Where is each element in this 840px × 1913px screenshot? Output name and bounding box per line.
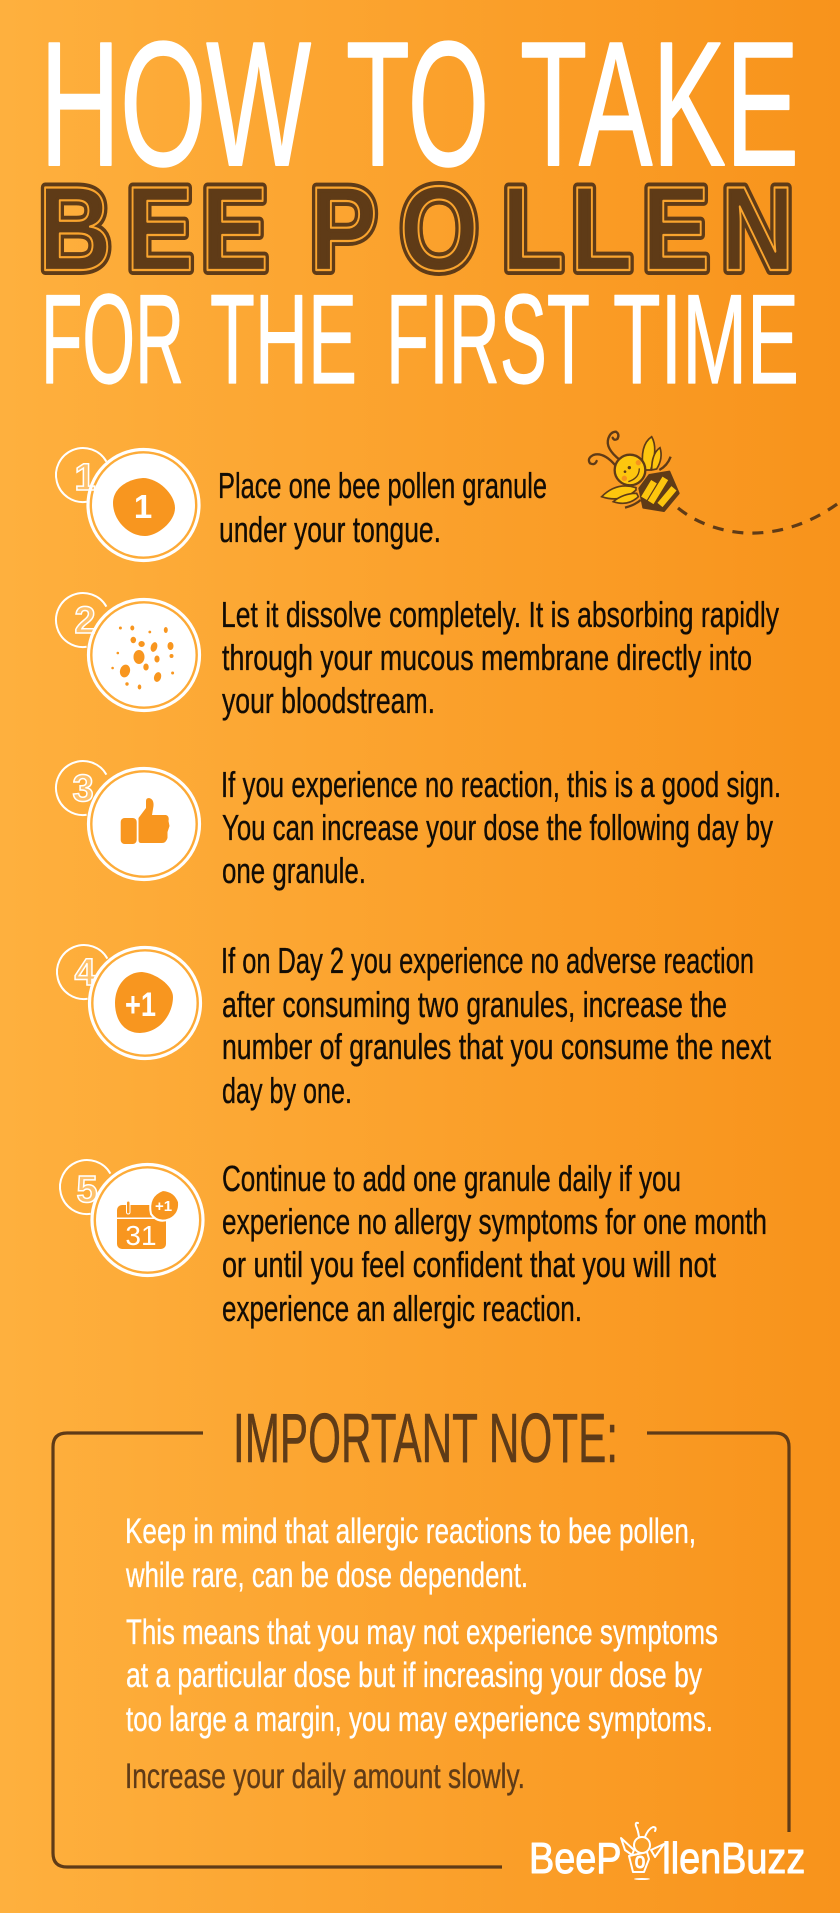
step 1 text bbox=[218, 465, 547, 550]
note paragraph 2 bbox=[126, 1613, 718, 1739]
step 2 bbox=[56, 593, 779, 721]
title line 3: FOR bbox=[41, 268, 184, 410]
step 3 icon: thumbs up bbox=[88, 768, 200, 880]
step 5 number badge: 5 bbox=[76, 1169, 98, 1211]
step 5 text: Continue to add one granule daily if you bbox=[222, 1158, 681, 1199]
step 3 number badge bbox=[56, 761, 106, 815]
title line 1: HOW bbox=[40, 5, 311, 203]
step 3 bbox=[56, 761, 781, 891]
title bbox=[38, 5, 799, 410]
step 2 text bbox=[221, 594, 779, 721]
step 3 text: one granule. bbox=[222, 850, 366, 891]
note paragraph 1 bbox=[125, 1512, 696, 1595]
step 4 bbox=[57, 940, 771, 1111]
step 4 icon: plus one granule: +1 bbox=[125, 986, 156, 1024]
dashed flight path bbox=[678, 502, 840, 533]
step 1 text: Place one bee pollen granule bbox=[218, 465, 547, 506]
title line 3 bbox=[41, 268, 799, 410]
step 1 icon: granule bbox=[88, 450, 199, 560]
note frame bbox=[53, 1433, 789, 1867]
logo wordmark: BeeP bbox=[529, 1833, 622, 1883]
step 1 number badge bbox=[56, 448, 106, 502]
title line 2: bee pollen: BEE POLLEN bbox=[38, 161, 794, 296]
step 5 icon: calendar plus one: 31 bbox=[125, 1220, 157, 1251]
title line 3: FIRST bbox=[386, 268, 590, 410]
logo: Bee Pollen Buzz bbox=[529, 1823, 805, 1883]
logo bee bbox=[621, 1823, 664, 1880]
title line 3: THE bbox=[210, 268, 357, 410]
step 2 icon: dissolving granules bbox=[88, 600, 200, 710]
step 5 text bbox=[222, 1158, 767, 1329]
step 5 icon: calendar plus one bbox=[92, 1164, 203, 1276]
logo wordmark: o bbox=[635, 1849, 645, 1873]
logo wordmark: llenBuzz bbox=[662, 1833, 805, 1883]
step 5 bbox=[60, 1158, 767, 1329]
step 2 text: your bloodstream. bbox=[222, 680, 435, 721]
note paragraph 1: while rare, can be dose dependent. bbox=[125, 1556, 528, 1595]
step 4 text: day by one. bbox=[222, 1070, 352, 1111]
step 4 number badge bbox=[57, 945, 107, 999]
step 5 icon: calendar plus one: +1 bbox=[155, 1198, 172, 1215]
step 1 number badge: 1 bbox=[74, 457, 96, 499]
step 3 text bbox=[221, 764, 781, 891]
title line 1 bbox=[40, 5, 799, 203]
important note panel bbox=[53, 1399, 789, 1867]
bee illustration bbox=[589, 432, 679, 511]
step 4 number badge: 4 bbox=[74, 952, 96, 994]
step 1 icon: granule: 1 bbox=[134, 488, 152, 525]
step 2 number badge bbox=[56, 593, 106, 647]
step 2 number badge: 2 bbox=[74, 600, 96, 642]
step 5 text: experience an allergic reaction. bbox=[222, 1288, 582, 1329]
note paragraph 3: Increase your daily amount slowly. bbox=[125, 1757, 525, 1796]
step 4 text bbox=[221, 940, 771, 1111]
step 4 icon: plus one granule bbox=[90, 948, 200, 1058]
title line 2: bee pollen: BEE POLLEN bbox=[38, 161, 794, 296]
step 1 text: under your tongue. bbox=[219, 509, 441, 550]
title line 1: TO bbox=[346, 5, 489, 203]
step 1 bbox=[56, 448, 547, 560]
step 5 number badge bbox=[60, 1160, 110, 1214]
step 3 number badge: 3 bbox=[72, 768, 94, 810]
